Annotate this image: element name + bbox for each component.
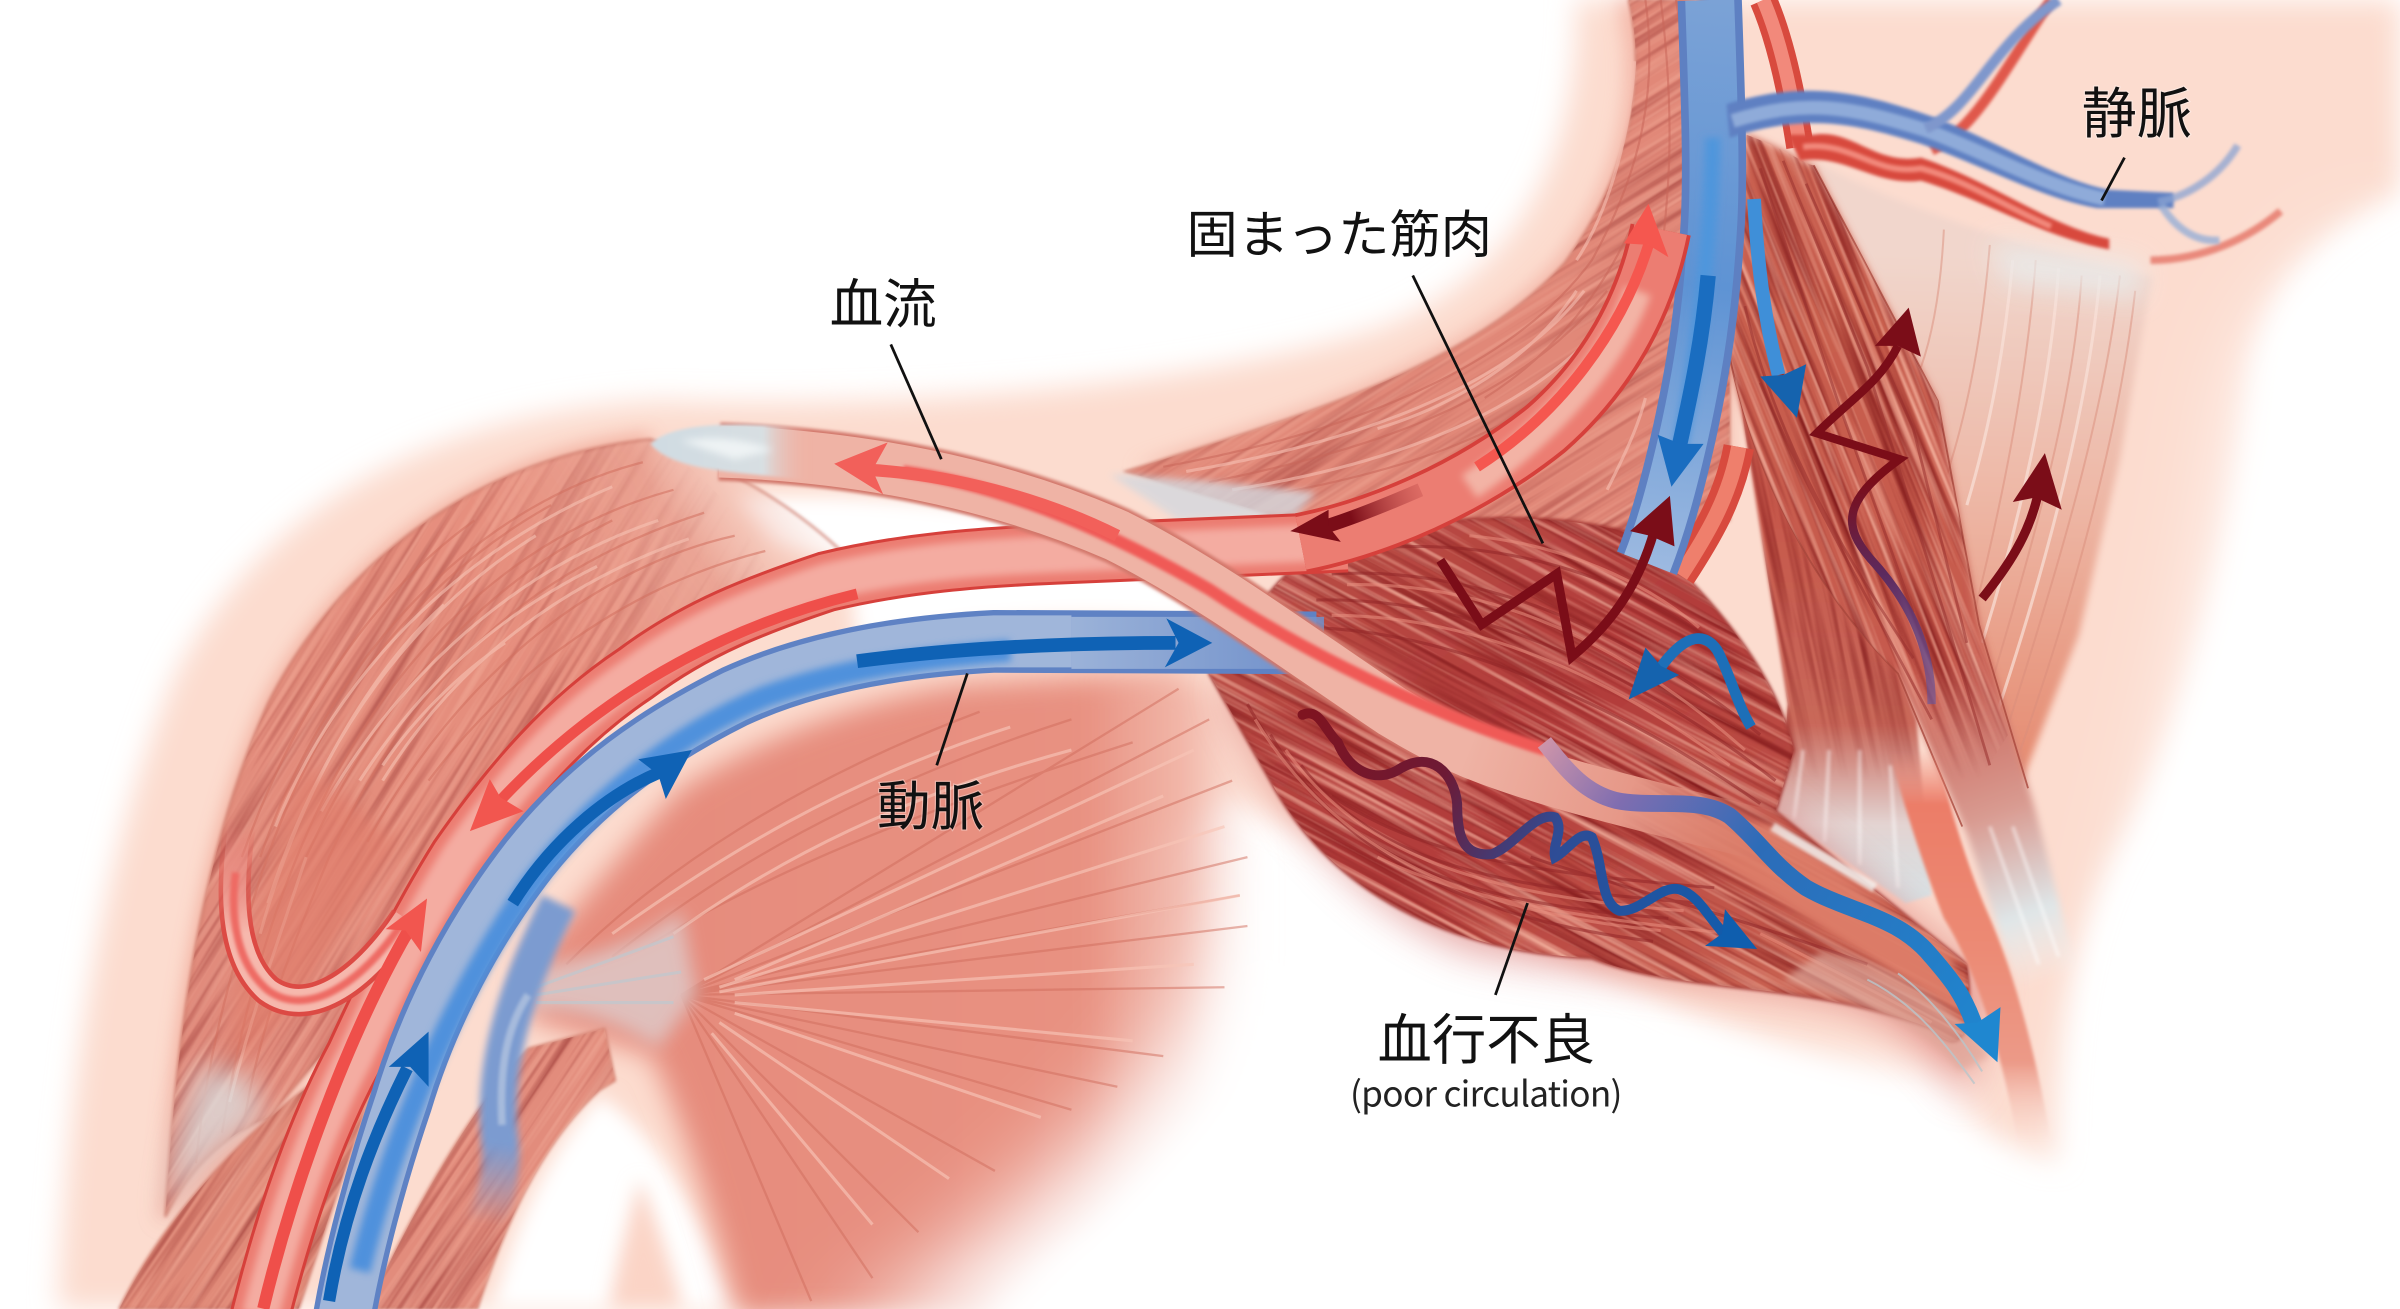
- arrow: poor circulation wave: [1303, 713, 1757, 949]
- label: stiff muscle: [1187, 207, 1543, 543]
- vessel: red loop branch: [234, 811, 406, 1000]
- label: artery: 動脈: [877, 778, 984, 837]
- vessel: shoulder artery: [260, 230, 1661, 1309]
- arrow: clavicle red flow: [834, 442, 1117, 536]
- muscle: upper arm bands: [119, 995, 615, 1309]
- label: blood flow: [830, 276, 941, 459]
- clavicle bone band: [651, 424, 1791, 842]
- muscle: strap with tendon: [1737, 383, 1932, 903]
- arrow: blue down in neck: [1754, 199, 1806, 418]
- arrow: zigzag in central muscle: [1440, 496, 1674, 657]
- label: poor circulation: (poor circulation): [1350, 1067, 1622, 1118]
- muscle: trapezius: [1110, 0, 1730, 539]
- label: artery: [877, 673, 984, 837]
- tendon: lower neck: [1783, 952, 1990, 1084]
- muscle: deltoid: [158, 433, 857, 1225]
- arrow: dark red on artery: [1290, 490, 1420, 542]
- arrow: blue wave along clavicle: [1544, 742, 2001, 1062]
- vessel: shoulder vein: [344, 617, 1324, 1309]
- muscle: right neck fan: [1814, 161, 2152, 785]
- label: blood flow: 血流: [830, 276, 937, 335]
- arrow: blue hook in central muscle: [1629, 638, 1751, 727]
- label: vein: [2082, 83, 2192, 201]
- label: poor circulation: 血行不良: [1378, 1010, 1595, 1071]
- muscle: central stiff muscle: [1209, 518, 1990, 1102]
- arrow: zigzag in neck muscle: [1817, 308, 1932, 704]
- arrow: dark red right neck: [1982, 453, 2062, 598]
- arrow: blue arrows on shoulder vein: [329, 618, 1212, 1301]
- vessel: lower right artery: [1889, 750, 2051, 1140]
- muscle: pectoral fan: [528, 670, 1378, 1309]
- arrow: red arrow up on trapezius: [1477, 204, 1668, 467]
- arch between upper arm and chest: [493, 1096, 735, 1309]
- label: stiff muscle: 固まった筋肉: [1187, 207, 1492, 264]
- vessel: neck vein: [1647, 0, 2238, 563]
- muscle: sternocleidomastoid: [1730, 135, 2085, 1003]
- label: poor circulation: [1350, 903, 1622, 1118]
- vessel: neck red artery: [1681, 0, 2281, 576]
- arrow: blue down in vein: [1658, 276, 1708, 487]
- arrow: red arrows on artery: [263, 594, 857, 1309]
- label: vein: 静脈: [2082, 83, 2192, 145]
